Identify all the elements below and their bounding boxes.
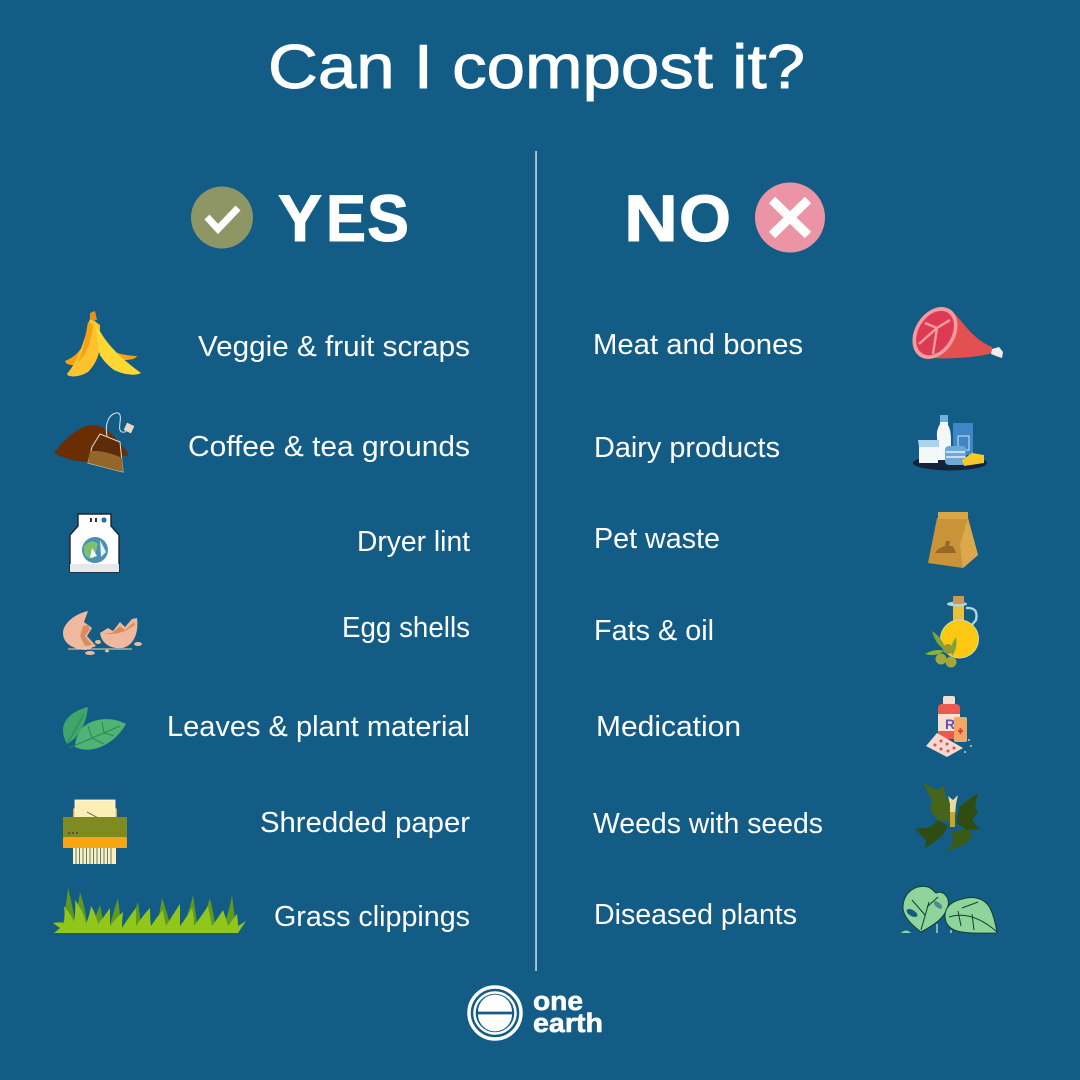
no label: N	[624, 181, 678, 255]
label: Meat and bones	[593, 329, 803, 361]
item: veggie and fruit scraps	[65, 311, 470, 376]
item: egg shells	[63, 611, 470, 655]
label: Medication	[596, 711, 741, 743]
icon: ham	[903, 299, 1003, 367]
label: Veggie & fruit scraps	[198, 331, 470, 363]
panel: yes column	[53, 181, 470, 933]
item: dairy products	[594, 415, 987, 470]
label: Fats & oil	[594, 615, 714, 647]
no label: O	[679, 181, 731, 255]
icon: coffee pile and tea bag	[54, 413, 134, 472]
item: fats and oil	[594, 596, 978, 668]
panel: no column	[593, 181, 1003, 933]
heading: no	[624, 181, 825, 255]
icon: cross mark	[755, 182, 825, 252]
icon: banana peel	[65, 311, 141, 376]
item: dryer lint	[70, 514, 470, 572]
label: Coffee & tea grounds	[188, 431, 470, 463]
item: weeds with seeds	[593, 783, 980, 851]
item: meat and bones	[593, 299, 1003, 367]
yes label: S	[367, 181, 409, 255]
item: coffee and tea grounds	[54, 413, 470, 472]
icon: olive oil bottle	[925, 596, 978, 668]
yes label: Y	[278, 181, 322, 255]
item: shredded paper	[63, 800, 470, 864]
label: Leaves & plant material	[167, 711, 470, 743]
icon: poop bag	[928, 512, 978, 568]
icon: green leaves	[63, 707, 126, 750]
icon: pills and bottles	[926, 696, 972, 757]
item: pet waste	[594, 512, 978, 568]
item: leaves and plant material	[63, 707, 470, 750]
item: medication	[596, 696, 972, 757]
label: Grass clippings	[274, 901, 470, 933]
label: Weeds with seeds	[593, 808, 823, 840]
icon: weed plant	[915, 783, 980, 851]
logo: one earth	[469, 986, 603, 1039]
logo wordmark	[533, 986, 603, 1038]
icon: monstera leaves	[901, 886, 997, 933]
icon: check mark	[191, 186, 253, 248]
icon: paper shredder	[63, 800, 127, 864]
label: Dairy products	[594, 432, 780, 464]
icon: broken egg shells	[63, 611, 142, 655]
label: Pet waste	[594, 523, 720, 555]
item: diseased plants	[594, 886, 997, 933]
logo mark	[469, 987, 521, 1039]
heading: yes	[191, 181, 409, 255]
label: Shredded paper	[260, 807, 470, 839]
label: Diseased plants	[594, 899, 797, 931]
icon: grass	[53, 888, 246, 933]
title: Can I compost it?	[268, 33, 805, 102]
logo wordmark: earth	[533, 1008, 603, 1038]
label: Dryer lint	[357, 526, 470, 558]
label: Egg shells	[342, 612, 470, 644]
icon: pills and bottles: R	[945, 716, 955, 732]
logo wordmark: one	[533, 986, 583, 1016]
yes label: E	[326, 181, 366, 255]
icon: dryer	[70, 514, 119, 572]
item: grass clippings	[53, 888, 470, 933]
icon: dairy group	[913, 415, 987, 470]
